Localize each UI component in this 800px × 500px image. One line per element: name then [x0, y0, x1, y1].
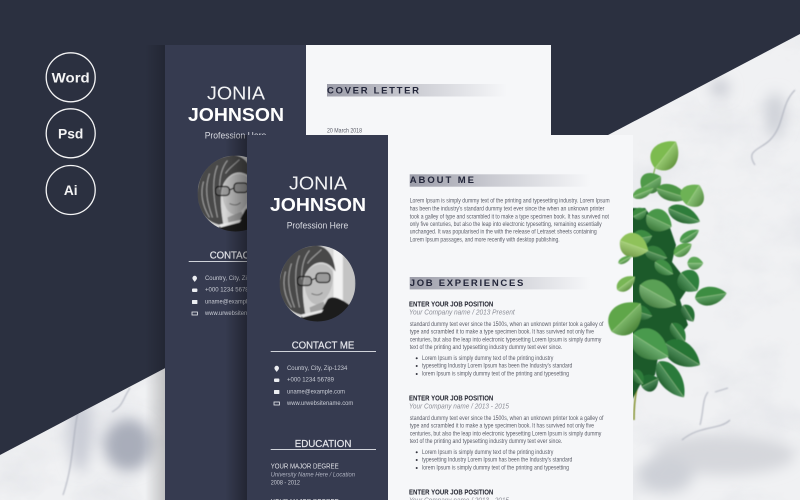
format badges	[46, 53, 95, 214]
job entry 1: Lorem Ipsum is simply dummy text of the printing industry	[422, 356, 553, 362]
education entries: University Name Here / Location	[271, 472, 356, 478]
job entry 1: ENTER YOUR JOB POSITION	[409, 302, 493, 309]
job entry 1: centuries, but also the leap into electronic typesetting Lorem Ipsum is simply dummy	[410, 337, 601, 343]
about me paragraph	[410, 199, 610, 244]
back name: JONIA	[207, 84, 265, 104]
job entry 3	[409, 489, 510, 500]
contact list: www.urwebsitename.com	[286, 400, 353, 407]
job entry 1: standard dummy text ever since the 1500s, when an unknown printer took a galley of	[410, 322, 604, 328]
back contact list: www.urwebsitename.com	[204, 310, 271, 317]
education entries	[271, 464, 356, 500]
about me paragraph: only five centuries, but also the leap into electronic typesetting, remaining essentially	[410, 222, 602, 228]
job entry 2: Your Company name / 2013 - 2015	[409, 402, 510, 411]
plant: leaves in front of page	[601, 229, 652, 343]
cover letter heading: COVER LETTER	[327, 86, 419, 97]
contact heading: CONTACT ME	[292, 340, 355, 351]
education heading	[271, 439, 376, 450]
job experiences heading	[410, 277, 591, 289]
badge: Psd	[46, 109, 95, 158]
back contact list: +000 1234 56789	[205, 287, 253, 294]
cover letter date: 20 March 2018	[327, 127, 362, 134]
front name: JONIA	[289, 174, 347, 194]
job entry 1	[409, 302, 604, 378]
job entry 2: standard dummy text ever since the 1500s, when an unknown printer took a galley of	[410, 416, 604, 422]
job entry 3: ENTER YOUR JOB POSITION	[409, 489, 493, 496]
about me paragraph: Lorem Ipsum is simply dummy text of the printing and typesetting industry. Lorem Ipsum	[410, 199, 610, 205]
badge: Word: Word	[52, 70, 90, 85]
stalk	[645, 168, 655, 190]
education entries: 2008 - 2012	[271, 479, 300, 486]
contact list: +000 1234 56789	[287, 377, 335, 384]
shadow: back document on background	[145, 45, 165, 500]
job entry 2: ENTER YOUR JOB POSITION	[409, 396, 493, 403]
education entries: YOUR MAJOR DEGREE	[271, 464, 339, 471]
job entry 1: text of the printing and typesetting industry dummy text ever since.	[410, 345, 563, 351]
about me heading: ABOUT ME	[410, 175, 474, 186]
badge: Ai	[46, 166, 95, 214]
about me paragraph: unchanged. It was popularised in the with the release of Letraset sheets containing	[410, 230, 597, 236]
back contact heading: CONTACT ME	[210, 250, 273, 261]
icon: telephone	[274, 378, 279, 382]
icon: location pin	[274, 366, 279, 372]
front sidebar panel	[247, 135, 388, 500]
badge: Ai: Ai	[64, 183, 78, 198]
front name: JOHNSON	[270, 195, 366, 215]
job entry 1: typesetting Industry Lorem Ipsum has been the Industry's standard	[422, 364, 572, 370]
back contact list: uname@example.com	[205, 299, 263, 306]
stem	[634, 385, 638, 420]
badge: Word	[46, 53, 95, 102]
contact list: Country, City, Zip-1234	[287, 365, 348, 372]
contact list: uname@example.com	[287, 389, 345, 396]
back page panel	[306, 45, 551, 135]
about me paragraph: took a galley of type and scrambled it to make a type specimen book. It has survived not	[410, 214, 609, 220]
back name: JOHNSON	[188, 105, 284, 125]
back contact list	[192, 275, 271, 317]
about me paragraph: Lorem Ipsum passages, and more recently with desktop publishing.	[410, 238, 560, 244]
back sidebar panel	[165, 45, 306, 500]
front name	[270, 174, 366, 215]
back contact list: Country, City, Zip-1234	[205, 275, 266, 282]
job experiences heading: JOB EXPERIENCES	[410, 278, 523, 289]
job entry 2: text of the printing and typesetting industry dummy text ever since.	[410, 439, 563, 445]
front photo	[279, 246, 356, 324]
back name	[188, 84, 284, 125]
foliage mass	[632, 208, 690, 400]
job entry 2	[409, 396, 604, 472]
job entry 2: typesetting Industry Lorem Ipsum has been the Industry's standard	[422, 458, 572, 464]
front document: resume	[247, 135, 633, 500]
job entry 2: centuries, but also the leap into electronic typesetting Lorem Ipsum is simply dummy	[410, 431, 601, 437]
icon: monitor	[274, 402, 279, 405]
icon: envelope	[274, 390, 279, 394]
job entry 1: type and scrambled it to make a type specimen book. It has survived not only five	[410, 329, 595, 335]
contact heading	[271, 340, 376, 352]
job entry 2: lorem Ipsum is simply dummy text of the printing and typesetting	[422, 466, 569, 472]
back document: cover letter	[165, 45, 551, 500]
back contact heading	[189, 250, 294, 262]
front page panel	[388, 135, 633, 500]
cover letter heading	[327, 84, 507, 97]
job entry 2: Lorem Ipsum is simply dummy text of the printing industry	[422, 450, 553, 456]
badge: Psd: Psd	[58, 126, 83, 141]
job entry 1: Your Company name / 2013 Present	[409, 308, 516, 317]
about me paragraph: has been the industry's standard dummy text ever since the when an unknown printer	[410, 206, 604, 212]
plant: leaves behind page	[625, 133, 728, 420]
education heading: EDUCATION	[295, 439, 351, 450]
shadow: front document on back document	[225, 135, 247, 500]
about me heading	[410, 174, 591, 187]
back profession: Profession Here	[205, 131, 266, 142]
leaves	[625, 133, 728, 404]
job entry 1: lorem Ipsum is simply dummy text of the printing and typesetting	[422, 372, 569, 378]
contact list	[274, 365, 353, 407]
back photo	[197, 156, 274, 234]
job entry 2: type and scrambled it to make a type specimen book. It has survived not only five	[410, 424, 595, 430]
front profession: Profession Here	[287, 221, 348, 232]
